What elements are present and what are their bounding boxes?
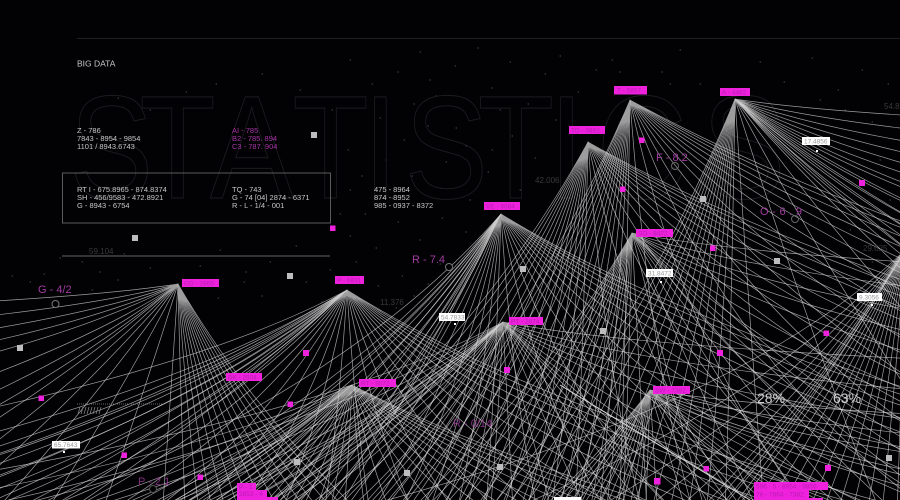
white tag: 65.7643 [52, 441, 80, 453]
fan: peak D [0, 142, 900, 500]
fan: peak H [0, 322, 900, 500]
info text: Z block: Z - 786 [77, 126, 101, 135]
info text: Z block: 1101 / 8943.6743 [77, 142, 135, 151]
rule with value 59.104: 59.104 [89, 247, 114, 256]
callout: R - 7.4 [412, 254, 452, 270]
tag: BK - 2904: BK - 2904 [228, 374, 257, 382]
tag: A - 4482 [720, 88, 750, 96]
callout: O - 6.9: O - 6 . 9 [760, 206, 802, 218]
tag: TD - 0892 [569, 126, 605, 134]
info text: TQ block: G - 74 [04] 2874 - 6371 [232, 193, 310, 202]
fan: peak I [0, 385, 900, 500]
callout: R - 7.4: R - 7.4 [412, 254, 445, 266]
tag block: bottom left: 2853 - 4 [239, 491, 263, 498]
tag: SW - 7382 [653, 386, 690, 394]
info text: RT block: RT I - 675.8965 - 874.8374 [77, 185, 167, 194]
outlined title: STATISTICS: STATISTICS [70, 65, 785, 229]
tag block: bottom left [237, 483, 278, 500]
tag: P - 6931 [335, 276, 364, 284]
starfield particles [12, 48, 890, 308]
white tag: 9.3056: 9.3056 [859, 294, 879, 302]
white tag: 65.7643: 65.7643 [54, 442, 78, 449]
framed box [62, 173, 330, 223]
faint values: 29.625 [863, 244, 888, 253]
tag: PT - 2874 [509, 317, 543, 326]
tag: T - 5857: T - 5857 [617, 88, 641, 94]
info text: 475 block: 475 - 8964 [374, 185, 410, 194]
fan: peak F [135, 99, 900, 500]
tag: RT - 9072: RT - 9072 [361, 380, 390, 388]
white tag: 54.7833: 54.7833 [441, 314, 465, 322]
white tag: 31.8472: 31.8472 [648, 270, 672, 278]
fan: peak C [0, 214, 900, 500]
tag block: bottom right: 78 - 7864 - 7382 [756, 492, 804, 498]
gray markers [17, 132, 892, 476]
white tag: 17.4856: 17.4856 [804, 138, 828, 146]
tag: BK - 2904 [226, 373, 262, 382]
faint values: 54.8 [884, 102, 900, 111]
top rule [77, 38, 900, 40]
info text: TQ block: R - L - 1/4 - 001 [232, 201, 284, 210]
callout: F - 8.2: F - 8.2 [656, 152, 688, 164]
info text: TQ block: TQ - 743 [232, 185, 262, 194]
tag: TD - 0892: TD - 0892 [571, 128, 600, 134]
tag: SO - 8472: SO - 8472 [638, 230, 668, 238]
magenta markers [38, 138, 865, 484]
callout: G - 4/2 [38, 284, 72, 308]
tag block: bottom right [754, 482, 828, 500]
tag block: bottom left: P - 1 [239, 484, 253, 491]
callout: F - 8.2 [656, 152, 688, 170]
heading: BIG DATA: BIG DATA [77, 58, 116, 68]
info text: RT block: SH - 456/9583 - 472.8921 [77, 193, 163, 202]
info text: Z block: 7843 - 8954 - 9854 [77, 134, 140, 143]
info text: RT block: G - 8943 - 6754 [77, 201, 130, 210]
white tag: 31.8472 [646, 269, 673, 283]
tag: RT - 9072 [359, 379, 396, 388]
tag: SW - 7382: SW - 7382 [655, 388, 686, 394]
tag block: bottom right: 596 - 5 - 8954 - 9856 [756, 484, 817, 490]
white tag: bottom [554, 497, 581, 500]
tag: P - 6931: P - 6931 [337, 278, 362, 284]
fan: right edge peak [0, 250, 900, 500]
white tag: 9.3056 [857, 293, 882, 306]
faint values: 42.006 [535, 176, 560, 185]
tag: VE - 6084 [484, 202, 520, 210]
fan: peak G [0, 233, 900, 500]
fan: peak B [0, 290, 900, 500]
white tag: 17.4856 [802, 137, 830, 152]
info text: 475 block: 985 - 0937 - 8372 [374, 201, 433, 210]
info text: magenta block: AI - 785 [232, 126, 258, 135]
info text: magenta block: C3 - 787. 904 [232, 142, 277, 151]
faint values [380, 102, 900, 307]
tag: A - 4482: A - 4482 [722, 90, 747, 96]
tag: GD - 2865 [182, 279, 219, 288]
callout: R - 0/4: R - 0/14 [453, 418, 492, 430]
bright diagonal strand [560, 385, 750, 500]
callout: P - 2.1: P - 2.1 [138, 476, 170, 488]
tag: GD - 2865: GD - 2865 [184, 280, 214, 288]
info text: magenta block: B2 - 785. 894 [232, 134, 277, 143]
fan: peak E [30, 100, 900, 500]
hatch marks [77, 404, 163, 414]
tag: PT - 2874: PT - 2874 [511, 318, 540, 326]
white tag: 54.7833 [439, 313, 465, 325]
faint values: 11.376 [380, 298, 404, 307]
percent: 63%: 63% [833, 390, 861, 406]
fan: peak A [0, 284, 778, 500]
percent: 28%: 28% [757, 390, 785, 406]
callout: G - 4/2: G - 4/2 [38, 284, 72, 296]
fan: peak J [0, 390, 900, 500]
tag: T - 5857 [614, 86, 647, 94]
tag: SO - 8472 [636, 229, 673, 238]
info text: 475 block: 874 - 8952 [374, 193, 410, 202]
tag: VE - 6084: VE - 6084 [486, 204, 515, 210]
